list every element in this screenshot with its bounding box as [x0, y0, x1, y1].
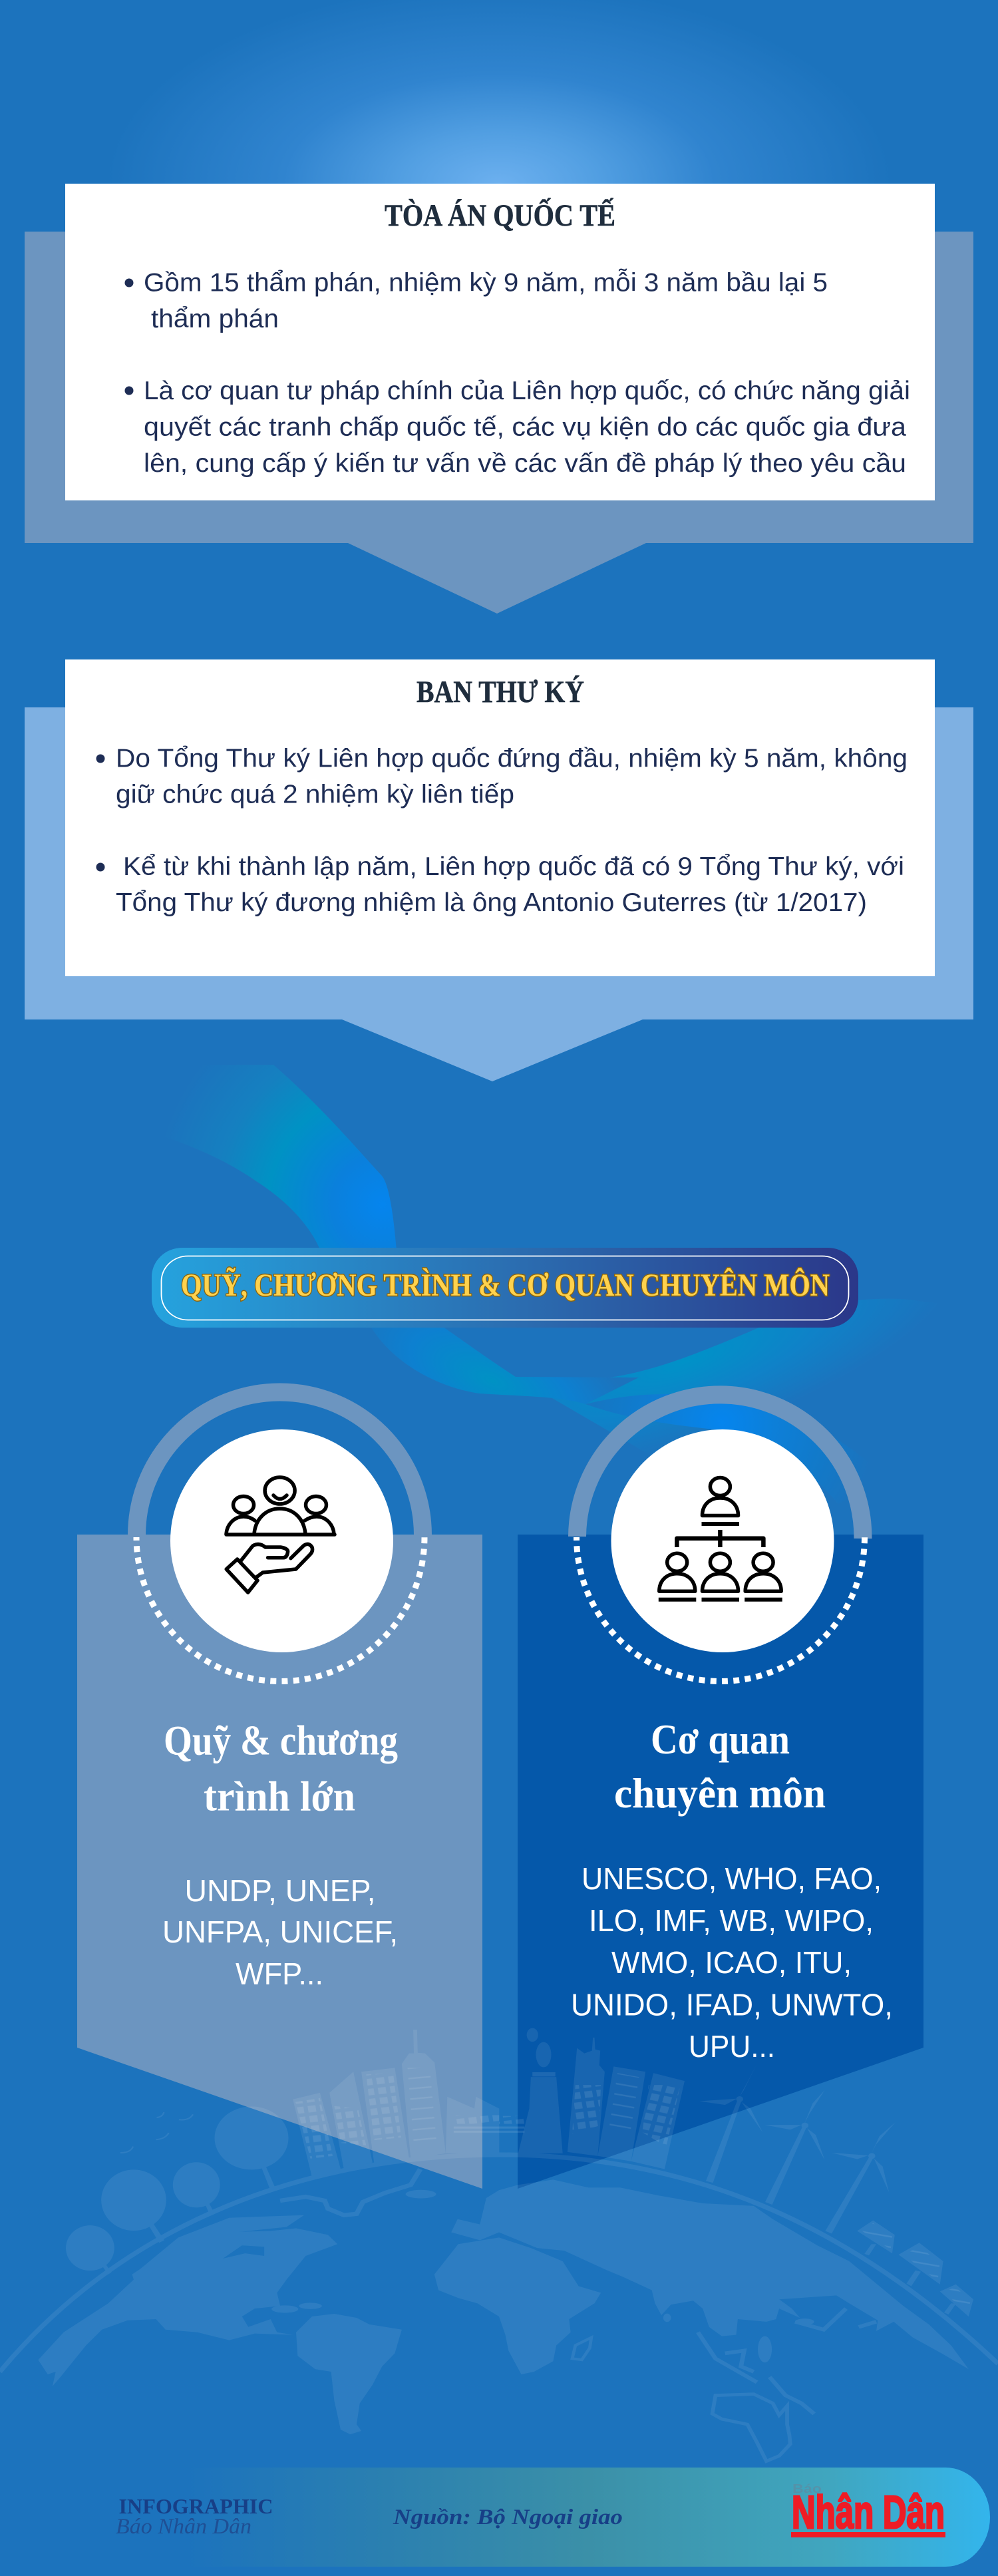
- white card: [65, 184, 935, 500]
- bullet text: chức năng: lên, cung cấp ý kiến tư vấn về các vấn đề pháp lý theo yêu cầu: [144, 449, 906, 478]
- panel: Tòa án Quốc tế: [25, 184, 973, 614]
- iceland: [406, 2190, 436, 2198]
- column two list: WMO, ICAO, ITU,: [611, 1945, 852, 1980]
- column two list: UNIDO, IFAD, UNWTO,: [571, 1987, 893, 2022]
- lower right person: [745, 1553, 782, 1602]
- bullet text: thành phần: Gồm 15 thẩm phán, nhiệm kỳ 9 năm, mỗi 3 năm bầu lại 5: [144, 269, 828, 297]
- icon: people on a hand: [226, 1477, 335, 1592]
- faint globe and city illustration: [0, 2028, 998, 2461]
- madagascar, sri lanka, islands: [572, 2338, 591, 2360]
- panel: Ban Thư ký: [25, 659, 973, 1081]
- white circle: [170, 1429, 393, 1652]
- eastern hemisphere: [434, 2028, 973, 2461]
- building windows overlay: [295, 2068, 971, 2312]
- solar panels: [857, 2221, 973, 2316]
- bullet text: Tổng Thư ký: [96, 744, 908, 809]
- bullet text: lịch sử: Kể từ khi thành lập năm, Liên hợp quốc đã có 9 Tổng Thư ký, với: [123, 852, 904, 881]
- bullet text: thành phần: [125, 269, 828, 333]
- lower middle person: [701, 1553, 739, 1602]
- column two heading: Cơ quan: [651, 1716, 790, 1763]
- north america: [38, 2229, 337, 2386]
- column one heading: trình lớn: [204, 1773, 355, 1819]
- trees: [66, 2106, 289, 2275]
- office towers: [568, 2038, 605, 2156]
- factory roof: [446, 2097, 499, 2153]
- column two list: ILO, IMF, WB, WIPO,: [589, 1903, 874, 1938]
- top person: [701, 1477, 739, 1526]
- lower left person: [659, 1553, 696, 1602]
- footer credit: [116, 2494, 273, 2539]
- australia outline: [713, 2394, 790, 2461]
- bullet text: thành phần: thẩm phán: [151, 305, 279, 333]
- bullet text: chức năng: Là cơ quan tư pháp chính của Liên hợp quốc, có chức năng giải: [144, 377, 910, 405]
- western hemisphere: [38, 2030, 499, 2434]
- connector: [677, 1530, 763, 1547]
- column two heading: chuyên môn: [614, 1770, 826, 1817]
- white card: [65, 659, 935, 976]
- dotted arc: [576, 1537, 865, 1681]
- globe rim: [0, 2155, 998, 2372]
- greenland outline: [280, 2169, 420, 2215]
- column panel: cơ quan chuyên môn: [518, 1535, 923, 2189]
- footer credit: INFOGRAPHIC: [118, 2494, 273, 2518]
- wind turbines: [699, 2064, 896, 2233]
- bullet text: lịch sử: [96, 852, 904, 917]
- column two heading: [614, 1716, 826, 1817]
- dotted arc: [136, 1537, 424, 1681]
- office towers: [293, 2093, 341, 2177]
- background swirl: [51, 1065, 998, 1504]
- south america: [296, 2314, 402, 2434]
- birds: [120, 2112, 193, 2153]
- outer arc: [137, 1392, 423, 1535]
- panel backing with arrow: [25, 707, 973, 1081]
- logo: Nhân Dân: Báo: [792, 2482, 822, 2495]
- bullet text: chức năng: quyết các tranh chấp quốc tế, các vụ kiện do các quốc gia đưa: [144, 413, 906, 442]
- column one list: UNDP, UNEP,: [185, 1873, 375, 1908]
- bullet text: lịch sử: Tổng Thư ký đương nhiệm là ông Antonio Guterres (từ 1/2017): [116, 888, 867, 917]
- column two header graphic: [576, 1395, 865, 1681]
- eurasia: [451, 2179, 969, 2369]
- africa: [434, 2237, 601, 2374]
- outer arc: [578, 1395, 863, 1539]
- footer source: Nguồn: Bộ Ngoại giao: [393, 2505, 623, 2529]
- column two list: [571, 1861, 893, 2064]
- chimney and leaves: [518, 2077, 563, 2153]
- column one heading: Quỹ & chương: [164, 1717, 398, 1763]
- top glow: [0, 0, 998, 466]
- bullet text: Tổng Thư ký: Do Tổng Thư ký Liên hợp quốc đứng đầu, nhiệm kỳ 5 năm, không: [116, 744, 908, 773]
- column two list: UPU...: [689, 2029, 775, 2064]
- column panel: quỹ và chương trình: [77, 1535, 482, 2189]
- panel backing with arrow: [25, 232, 973, 614]
- column one heading: [164, 1717, 398, 1819]
- footer bar: [186, 2468, 990, 2567]
- bullet text: chức năng: [125, 377, 910, 478]
- icon: organisation chart: [659, 1477, 782, 1602]
- arctic islands: [134, 2215, 304, 2275]
- east asian and oceanian island chains: [698, 2308, 876, 2414]
- bullet text: Tổng Thư ký: giữ chức quá 2 nhiệm kỳ liên tiếp: [116, 780, 514, 809]
- heading: BAN THƯ KÝ: [416, 675, 584, 709]
- heading: TÒA ÁN QUỐC TẾ: [385, 198, 615, 233]
- white circle: [611, 1429, 834, 1652]
- section banner: QUỸ, CHƯƠNG TRÌNH & CƠ QUAN CHUYÊN MÔN: [181, 1266, 830, 1303]
- column one list: WFP...: [236, 1956, 323, 1991]
- section banner: [152, 1248, 858, 1328]
- column one header graphic: [136, 1392, 424, 1681]
- column two list: UNESCO, WHO, FAO,: [582, 1861, 882, 1896]
- footer credit: Báo Nhân Dân: [116, 2515, 251, 2539]
- column one list: UNFPA, UNICEF,: [162, 1915, 398, 1949]
- caribbean: [271, 2305, 298, 2312]
- column one list: [162, 1873, 398, 1991]
